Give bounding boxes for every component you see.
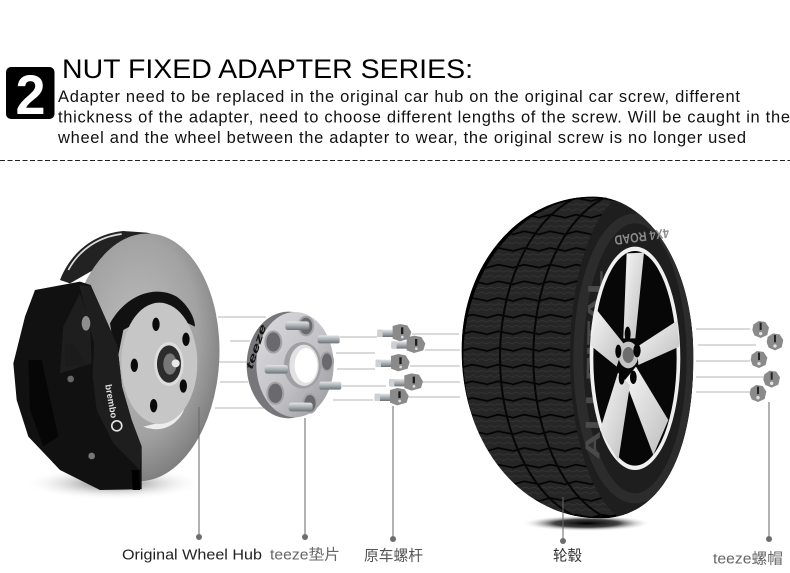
callout leaders [196, 402, 772, 544]
tire shadow [522, 515, 652, 531]
caliper [13, 282, 142, 490]
wheel center [618, 342, 638, 368]
dust shield [60, 231, 190, 283]
description text [57, 88, 790, 147]
sidewall lettering: 4X4 ROAD [613, 225, 670, 248]
connector lines [215, 317, 765, 408]
brake disc with caliper [13, 230, 226, 500]
brembo logo: brembo [103, 383, 119, 419]
number badge [6, 63, 54, 126]
spacer bore [284, 342, 321, 389]
spacer holes [265, 317, 333, 413]
tire and wheel [462, 196, 694, 530]
spacer studs [265, 321, 341, 411]
callout labels: teeze垫片 [270, 546, 340, 564]
brake shadow [23, 467, 203, 500]
title: NUT FIXED ADAPTER SERIES: [62, 54, 473, 84]
wheel spacer [244, 312, 341, 418]
spacer body [247, 312, 330, 418]
tread [462, 196, 694, 518]
brembo logo [103, 383, 123, 432]
original car bolts [375, 324, 425, 405]
wheel hub face [121, 303, 197, 424]
lug holes [615, 327, 641, 385]
callout labels: Original Wheel Hub [122, 546, 262, 564]
callout labels: 轮毂 [553, 548, 582, 564]
sidewall [570, 200, 694, 516]
hub bolt holes [131, 318, 190, 412]
number badge: 2 [16, 63, 46, 126]
description text: Adapter need to be replaced in the original car hub on the original car screw, different [58, 88, 740, 106]
hub recess [110, 292, 195, 363]
callout labels: 原车螺杆 [364, 548, 423, 564]
teeze lug nuts [750, 321, 783, 402]
rim [590, 247, 680, 470]
dashed divider [0, 160, 790, 162]
tire and wheel: ALLFITAL [581, 270, 608, 460]
center bearing [154, 342, 184, 386]
description text: thickness of the adapter, need to choose different lengths of the screw. Will be caught in the [58, 108, 790, 126]
spokes [590, 253, 679, 461]
callout labels [122, 546, 783, 568]
callout labels: teeze螺帽 [713, 550, 783, 568]
teeze logo: teeze [244, 322, 270, 371]
caliper fittings [82, 316, 90, 331]
description text: wheel and the wheel between the adapter to wear, the original screw is no longer used [57, 129, 746, 147]
brake rotor [61, 230, 226, 485]
brake line [132, 470, 140, 490]
